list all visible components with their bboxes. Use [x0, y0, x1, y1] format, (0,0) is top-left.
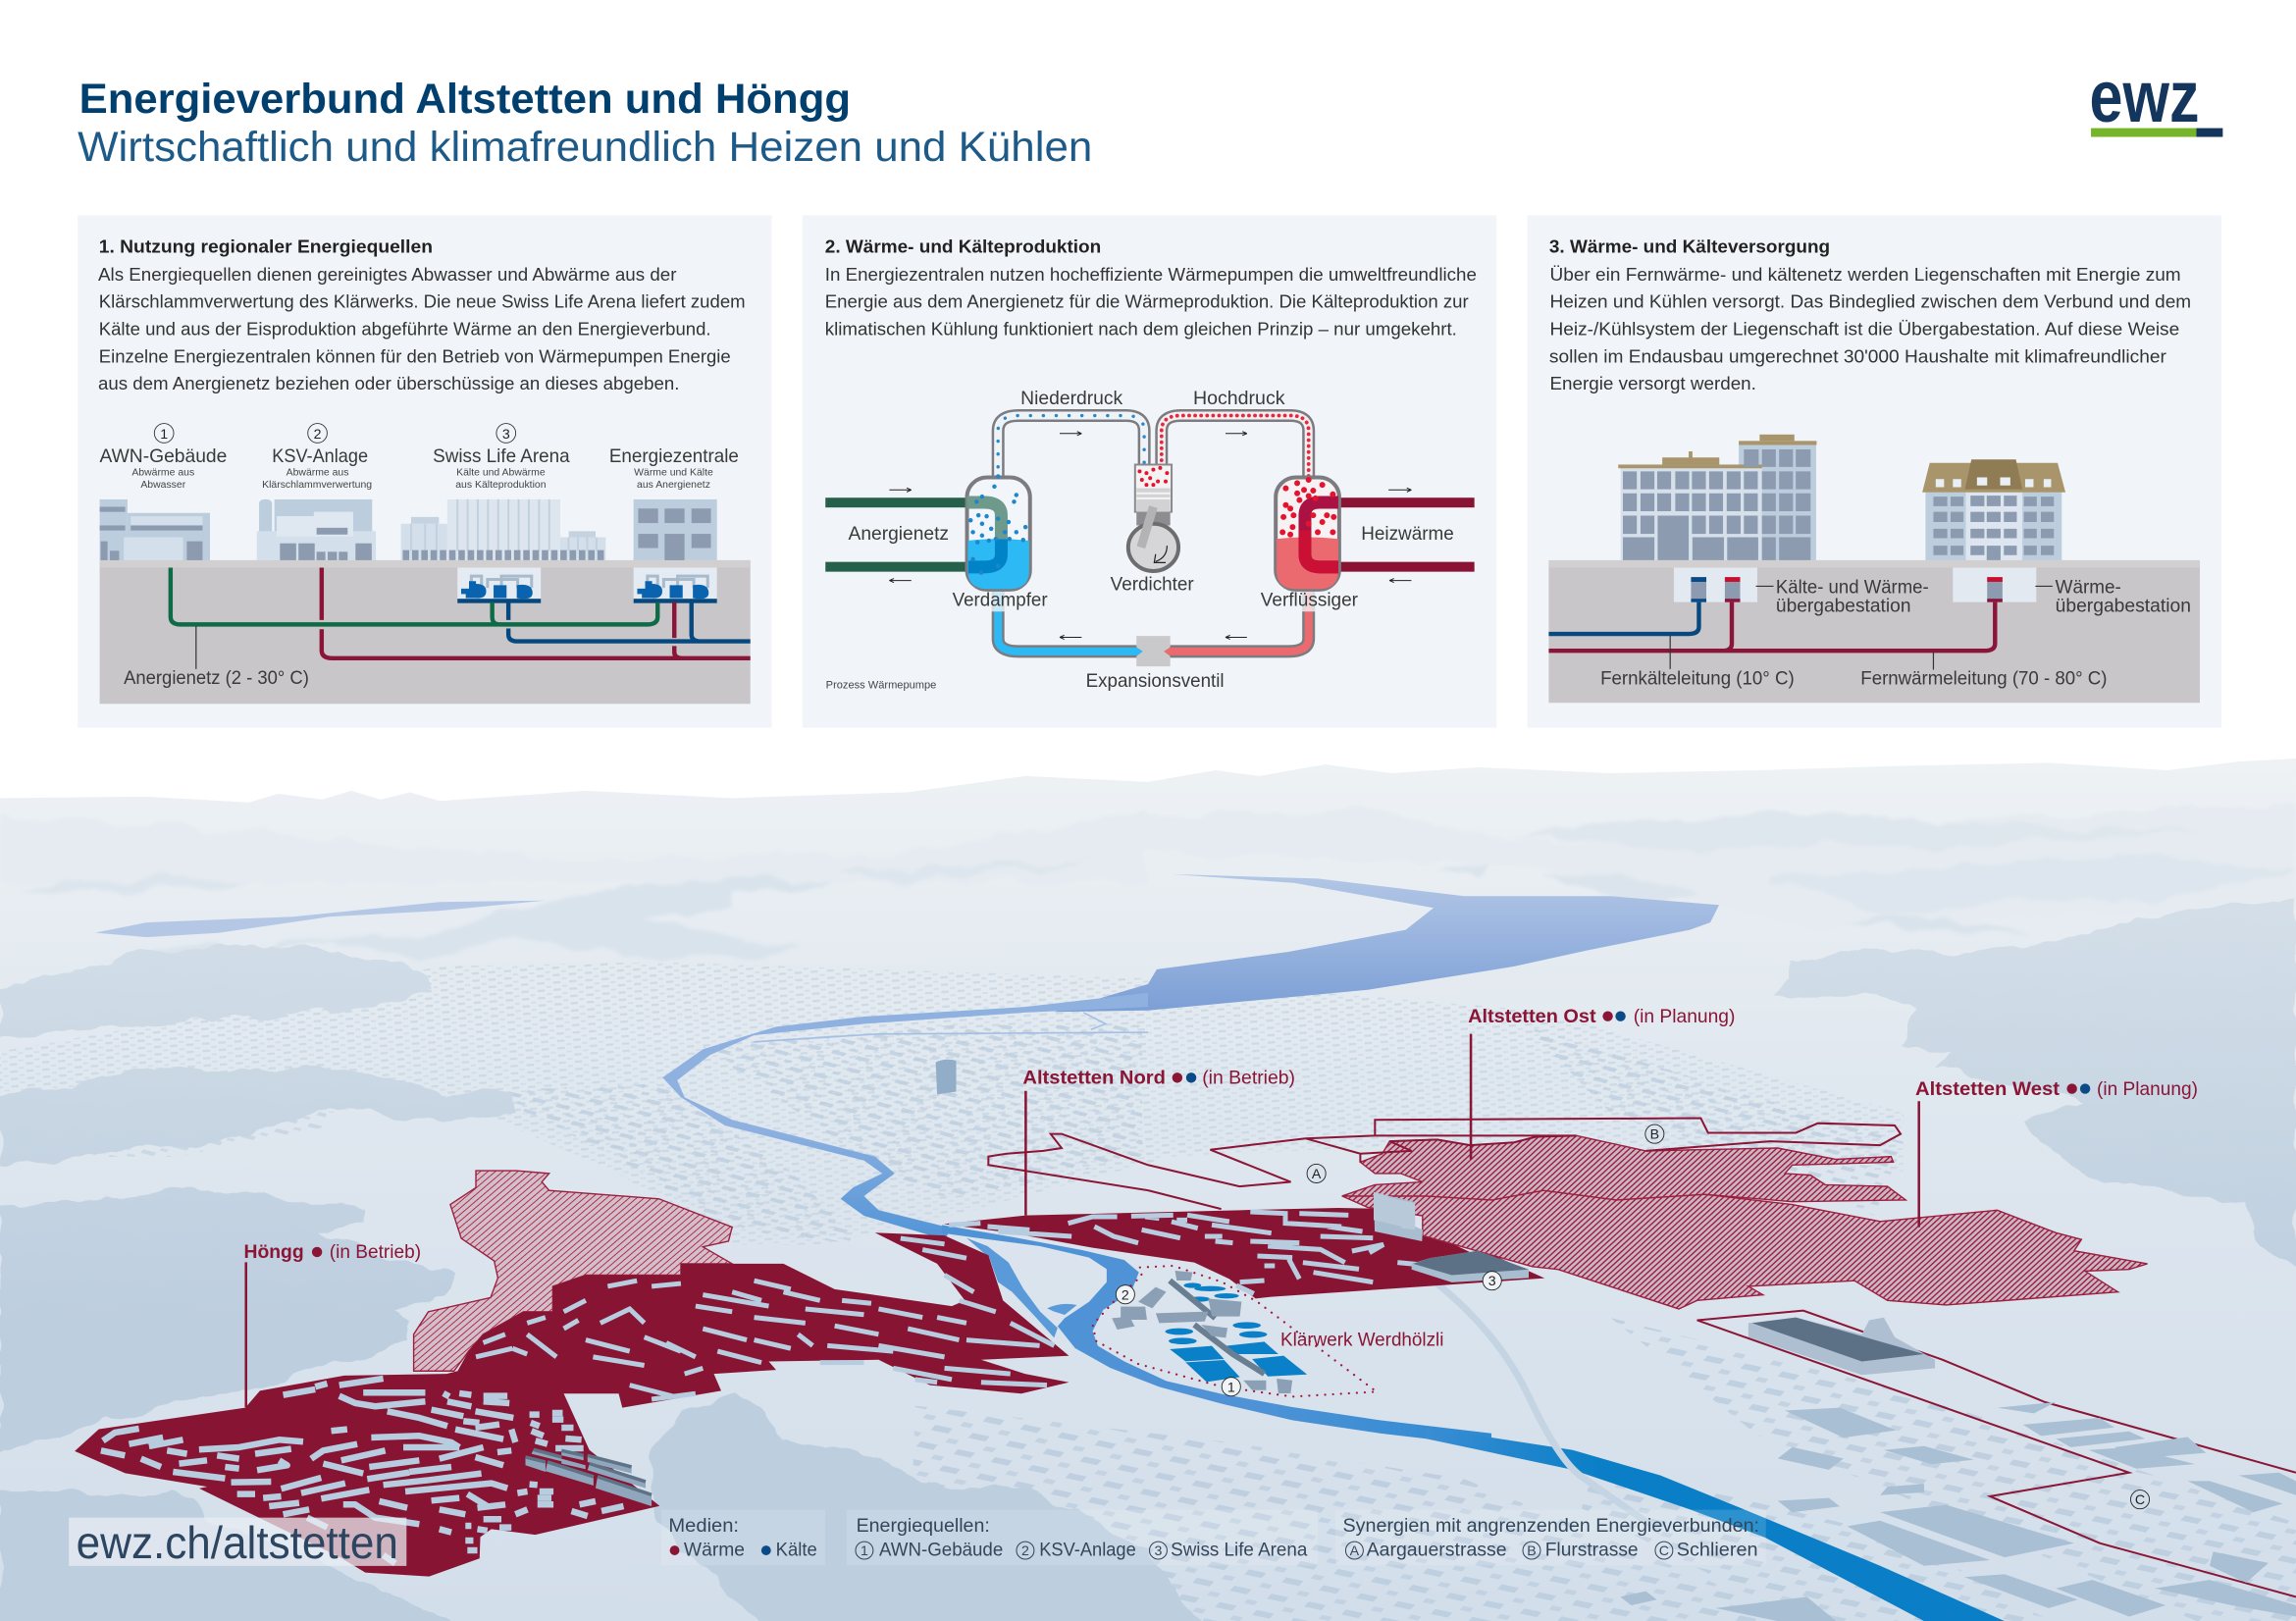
label: Altstetten Nord: (in Betrieb) — [1202, 1067, 1295, 1088]
city texture near — [908, 1318, 2296, 1621]
city texture far and mid — [0, 962, 1904, 1244]
Höngg dark building block — [526, 1449, 652, 1506]
supply labels: Fernwärmeleitung (70 - 80° C) — [1860, 667, 2107, 689]
towers at Altstetten — [1374, 1192, 1423, 1241]
labels: energy sources: Kälte und Abwärme — [456, 467, 546, 478]
panel 2: Wärme- und Kälteproduktion — [803, 215, 1496, 728]
heat pump labels: Prozess Wärmepumpe — [826, 679, 936, 691]
building 3 Swiss Life Arena — [1412, 1251, 1529, 1282]
building: Swiss Life Arena — [401, 499, 605, 560]
Klärwerk Werdhölzli plant — [1093, 1266, 1377, 1396]
heat pump labels — [826, 388, 1454, 692]
labels: energy sources: Swiss Life Arena — [433, 445, 570, 467]
planned hatch Altstetten Ost — [1342, 1135, 1905, 1202]
labels: energy sources: Klärschlammverwertung — [262, 480, 372, 491]
panel 1 body text: Einzelne Energiezentralen können für den Betrieb von Wärmepumpen Energie — [99, 345, 731, 366]
Höngg west buildings — [101, 1379, 624, 1563]
terrain base with mountain skyline — [0, 758, 2296, 1621]
office building — [1618, 435, 1816, 560]
label: Altstetten Nord — [1022, 1067, 1295, 1088]
pipes: blue — [508, 602, 751, 642]
panel 1: Nutzung regionaler Energiequellen — [78, 215, 771, 728]
legend: Energiequellen: 3 — [1155, 1543, 1163, 1559]
panel 3 body text: Heizen und Kühlen versorgt. Das Bindeglied zwischen dem Verbund und dem — [1549, 290, 2191, 311]
labels: energy sources — [99, 424, 739, 491]
labels: energy sources: KSV-Anlage — [272, 445, 368, 467]
labels: energy sources: Abwärme aus — [131, 467, 194, 478]
liquid return pipes — [998, 588, 1309, 652]
legend: Medien: Kälte — [776, 1540, 817, 1561]
panel 3: Wärme- und Kälteversorgung — [1528, 215, 2221, 728]
legend: Energiequellen: 1 — [861, 1543, 868, 1559]
flow arrows — [889, 432, 1411, 640]
leaders — [1670, 586, 2053, 670]
ground section diagram with buildings and pipes — [100, 499, 751, 704]
legend: Synergien: A — [1350, 1543, 1360, 1559]
panel 3 body text: sollen im Endausbau umgerechnet 30'000 Haushalte mit klimafreundlicher — [1549, 345, 2166, 366]
title block: Energieverbund Altstetten und Höngg — [79, 76, 851, 123]
map markers: B — [1650, 1127, 1659, 1143]
heat pump labels: Niederdruck — [1020, 388, 1122, 409]
title block: Wirtschaftlich und klimafreundlich Heizen und Kühlen — [78, 124, 1092, 171]
big building lower right — [1748, 1318, 1935, 1375]
planned hatch Altstetten West — [1342, 1190, 2148, 1309]
panel 1 body text: Als Energiequellen dienen gereinigtes Abwasser und Abwärme aus der — [98, 264, 676, 285]
supply labels: Fernkälteleitung (10° C) — [1600, 667, 1795, 689]
legend: Synergien — [1335, 1510, 1766, 1565]
compressor — [1128, 464, 1178, 571]
labels: energy sources: 2 — [314, 427, 322, 443]
river lower reach — [1427, 1428, 2005, 1621]
map markers: C — [2135, 1492, 2145, 1508]
supply labels: Wärme- — [2056, 576, 2121, 598]
url box: ewz.ch/altstetten — [77, 1517, 398, 1568]
distant tower — [936, 1060, 957, 1094]
legend: Energiequellen: Swiss Life Arena — [1171, 1540, 1308, 1561]
leader lines — [246, 1034, 1919, 1407]
heat pump labels: Heizwärme — [1361, 523, 1454, 545]
labels: energy sources: aus Kälteproduktion — [455, 480, 547, 491]
heat pump labels: Hochdruck — [1193, 388, 1285, 409]
pale road — [1437, 1283, 1660, 1532]
legend: Synergien: Flurstrasse — [1545, 1540, 1639, 1561]
side channel — [755, 1013, 1148, 1042]
synergy outlines A, B, C — [988, 1119, 2296, 1596]
transfer stations — [1674, 568, 2036, 602]
pumps — [457, 568, 717, 603]
logo: ewz: ewz — [2090, 55, 2199, 137]
labels: energy sources: AWN-Gebäude — [99, 445, 227, 467]
leader — [195, 626, 197, 669]
network area: Höngg — [75, 1232, 1069, 1577]
label: Altstetten Nord: Altstetten Nord — [1022, 1067, 1166, 1088]
residential house — [1922, 459, 2065, 560]
river canal arm — [966, 1238, 1077, 1337]
foreground industrial blocks — [1620, 1402, 2296, 1621]
panel 3 body text: Energie versorgt werden. — [1549, 373, 1756, 393]
legend: Synergien: Synergien mit angrenzenden Energieverbunden: — [1342, 1515, 1759, 1537]
panel 1 body text: Klärschlammverwertung des Klärwerks. Die neue Swiss Life Arena liefert zudem — [99, 290, 746, 311]
supply labels — [1600, 576, 2191, 689]
building: KSV — [257, 499, 376, 560]
legend: Synergien: Aargauerstrasse — [1367, 1540, 1507, 1561]
legend: Energiequellen: KSV-Anlage — [1039, 1540, 1136, 1561]
panel 3 heading: 3. Wärme- und Kälteversorgung — [1549, 235, 1830, 256]
label: Altstetten West: (in Planung) — [2097, 1078, 2198, 1100]
map: aerial view Altstetten and Höngg — [0, 758, 2296, 1621]
map markers: 3 — [1488, 1274, 1496, 1289]
map markers: 2 — [1122, 1287, 1129, 1303]
heat pump labels: Anergienetz — [849, 523, 949, 545]
foreground forests — [0, 1395, 1216, 1621]
label: Altstetten Ost — [1468, 1006, 1735, 1027]
panel 3 body text: Über ein Fernwärme- und kältenetz werden Liegenschaften mit Energie zum — [1549, 264, 2181, 285]
title block — [78, 76, 1092, 171]
legend: Medien: Medien: — [668, 1515, 739, 1537]
label: Höngg: (in Betrieb) — [330, 1241, 421, 1263]
planned hatch Höngg north — [414, 1171, 732, 1371]
distant hills — [0, 804, 2296, 962]
district cooling pipe — [1548, 602, 1698, 634]
supply labels: übergabestation — [1776, 595, 1910, 616]
panel 2 body text: In Energiezentralen nutzen hocheffiziente Wärmepumpen die umweltfreundliche — [825, 264, 1477, 285]
map markers: A — [1312, 1167, 1322, 1182]
label: Anergienetz: Anergienetz (2 - 30° C) — [124, 667, 309, 689]
labels: energy sources: Wärme und Kälte — [634, 467, 713, 478]
network area: Altstetten Nord — [944, 1208, 1544, 1298]
panel 1 body text: Kälte und aus der Eisproduktion abgeführte Wärme an den Energieverbund. — [99, 319, 711, 340]
panel 2 body text: Energie aus dem Anergienetz für die Wärmeproduktion. Die Kälteproduktion zur — [825, 290, 1469, 311]
labels: energy sources: aus Anergienetz — [637, 480, 710, 491]
legend: Synergien: Schlieren — [1677, 1540, 1758, 1561]
labels: energy sources: 1 — [160, 427, 168, 443]
heat pump labels: Verdampfer — [953, 589, 1048, 610]
label: Altstetten West — [1915, 1078, 2198, 1100]
evaporator vessel — [967, 477, 1030, 590]
heat pump diagram — [825, 416, 1475, 666]
panel 2 heading: 2. Wärme- und Kälteproduktion — [825, 235, 1101, 256]
panel 1 heading: 1. Nutzung regionaler Energiequellen — [99, 235, 433, 256]
labels: energy sources: Energiezentrale — [609, 445, 739, 467]
legend: Medien: Wärme — [684, 1540, 745, 1561]
pipes: Anergienetz green — [171, 568, 657, 624]
labels: energy sources: Abwasser — [140, 480, 186, 491]
panel 1 body text: aus dem Anergienetz beziehen oder überschüssige an dieses abgeben. — [98, 373, 679, 393]
panel 2 body text — [825, 264, 1477, 340]
label: Altstetten Ost: Altstetten Ost — [1468, 1006, 1596, 1027]
supply diagram — [1548, 435, 2200, 703]
legend: Medien — [661, 1510, 825, 1565]
lakes — [95, 874, 1719, 1012]
supply labels: übergabestation — [2056, 595, 2191, 616]
forests — [0, 898, 2296, 1449]
high pressure pipe — [1162, 416, 1309, 481]
label: Höngg: Höngg — [243, 1241, 304, 1263]
building: AWN — [100, 499, 210, 560]
low pressure pipe — [998, 416, 1144, 481]
legend: Energiequellen: 2 — [1021, 1543, 1029, 1559]
river upper reach — [662, 993, 1148, 1239]
legend: Synergien: C — [1659, 1543, 1669, 1559]
pipes: red — [322, 568, 751, 658]
label: Altstetten West: Altstetten West — [1915, 1078, 2061, 1100]
district heating pipe — [1548, 602, 1995, 651]
heat pump labels: Verflüssiger — [1261, 589, 1359, 610]
Höngg middle buildings — [476, 1238, 1054, 1399]
building: Energiezentrale — [634, 499, 717, 560]
legend: Energiequellen: AWN-Gebäude — [879, 1540, 1003, 1561]
legend: Synergien: B — [1527, 1543, 1537, 1559]
panel 1 body text — [98, 264, 746, 393]
labels: energy sources: Abwärme aus — [287, 467, 348, 478]
supply labels: Kälte- und Wärme- — [1776, 576, 1929, 598]
river middle reach — [942, 1225, 1491, 1446]
map markers: 1 — [1227, 1380, 1235, 1395]
condenser vessel — [1276, 478, 1339, 590]
faded pipe section behind labels — [987, 591, 1320, 611]
label: Altstetten Ost: (in Planung) — [1634, 1006, 1735, 1027]
map markers — [1116, 1124, 2150, 1509]
label: Klärwerk Werdhölzli: Klärwerk Werdhölzli — [1280, 1329, 1443, 1350]
connecting bars — [825, 497, 1475, 572]
expansion valve — [1136, 636, 1171, 666]
label: Höngg — [243, 1241, 421, 1263]
legend: Energiequellen — [847, 1510, 1318, 1565]
heat pump labels: Expansionsventil — [1086, 670, 1225, 692]
legend: Energiequellen: Energiequellen: — [857, 1515, 990, 1537]
panel 2 body text: klimatischen Kühlung funktioniert nach dem gleichen Prinzip – nur umgekehrt. — [825, 319, 1457, 340]
labels: energy sources: 3 — [502, 427, 510, 443]
panel 3 body text — [1549, 264, 2191, 393]
panel 3 body text: Heiz-/Kühlsystem der Liegenschaft ist die Übergabestation. Auf diese Weise — [1549, 319, 2179, 340]
heat pump labels: Verdichter — [1111, 573, 1194, 595]
